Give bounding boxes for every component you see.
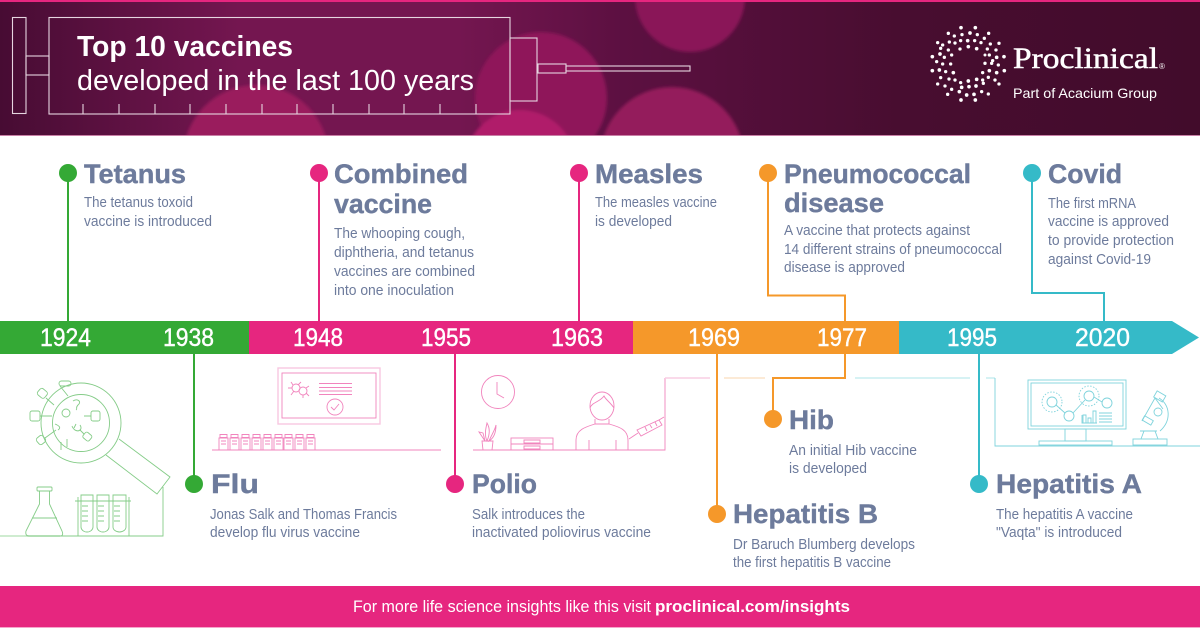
event: Flu 1938: Flu bbox=[211, 469, 259, 499]
event: Hib 1977: Hib bbox=[789, 405, 834, 435]
title: developed in the last 100 years bbox=[77, 65, 474, 97]
year labels: 1948 bbox=[293, 324, 343, 352]
event: Tetanus 1924: vaccine is introduced bbox=[84, 214, 212, 230]
logo: Proclinical bbox=[930, 26, 1165, 102]
event: Flu 1938: Jonas Salk and Thomas Francis bbox=[210, 507, 397, 523]
event: Polio 1955: inactivated poliovirus vaccine bbox=[472, 525, 651, 541]
logo strapline: Part of Acacium Group bbox=[1013, 85, 1157, 101]
event: Measles 1963 bbox=[570, 159, 717, 321]
year labels: 1995 bbox=[947, 324, 997, 352]
icon: dotted ring bbox=[930, 26, 1006, 102]
illustration: patient, clock and syringe bbox=[473, 376, 665, 450]
illustration: virus, flask and test tubes bbox=[0, 381, 170, 536]
event: Tetanus 1924 bbox=[59, 159, 212, 321]
event: Pneumococcal disease: disease is approved bbox=[784, 260, 905, 276]
event: Pneumococcal disease: 14 different strains of pneumococcal bbox=[784, 242, 1002, 258]
event: Covid 2020 bbox=[1023, 159, 1174, 321]
event: Pneumococcal disease: A vaccine that protects against bbox=[784, 223, 970, 239]
event: Combined vaccine 1948 bbox=[310, 159, 475, 321]
year labels: 1924 bbox=[40, 324, 91, 352]
event: Hepatitis B 1969 bbox=[708, 354, 915, 571]
event: Hepatitis B 1969: the first hepatitis B vaccine bbox=[733, 555, 891, 571]
event: Hepatitis A 1995 bbox=[970, 354, 1142, 541]
illustration: monitor and microscope bbox=[995, 378, 1200, 446]
event: Hepatitis B 1969: Dr Baruch Blumberg develops bbox=[733, 537, 915, 553]
event: Hepatitis A 1995: The hepatitis A vaccine bbox=[996, 507, 1133, 523]
event: Combined vaccine 1948: Combined bbox=[334, 159, 468, 189]
year labels: 1938 bbox=[163, 324, 214, 352]
event: Covid 2020: against Covid-19 bbox=[1048, 252, 1151, 268]
year labels: 1955 bbox=[421, 324, 471, 352]
year labels: 1977 bbox=[817, 324, 867, 352]
event: Covid 2020: vaccine is approved bbox=[1048, 214, 1169, 230]
event: Covid 2020: Covid bbox=[1048, 159, 1122, 189]
event: Polio 1955: Salk introduces the bbox=[472, 507, 585, 523]
year labels: 1963 bbox=[551, 324, 603, 352]
event: Hib 1977: An initial Hib vaccine bbox=[789, 443, 917, 459]
event: Hib 1977 bbox=[764, 354, 917, 477]
event: Pneumococcal disease: Pneumococcal bbox=[784, 159, 971, 189]
footer banner bbox=[0, 586, 1200, 628]
event: Combined vaccine 1948: vaccines are combined bbox=[334, 264, 475, 280]
event: Measles 1963: Measles bbox=[595, 159, 703, 189]
event: Combined vaccine 1948: The whooping cough, bbox=[334, 226, 465, 242]
event: Combined vaccine 1948: diphtheria, and tetanus bbox=[334, 245, 474, 261]
year labels: 2020 bbox=[1075, 324, 1130, 352]
event: Polio 1955 bbox=[446, 354, 651, 541]
timeline bar bbox=[0, 321, 1199, 354]
year labels: 1969 bbox=[688, 324, 740, 352]
title: Top 10 vaccines bbox=[77, 31, 293, 63]
event: Covid 2020: The first mRNA bbox=[1048, 196, 1136, 212]
event: Measles 1963: is developed bbox=[595, 214, 672, 230]
year labels bbox=[40, 324, 1130, 352]
pale connector segments bbox=[665, 377, 995, 379]
event: Covid 2020: to provide protection bbox=[1048, 233, 1174, 249]
event: Combined vaccine 1948: into one inoculation bbox=[334, 283, 454, 299]
event: Pneumococcal disease: disease bbox=[784, 188, 884, 218]
event: Combined vaccine 1948: vaccine bbox=[334, 189, 432, 219]
event: Flu 1938: develop flu virus vaccine bbox=[210, 525, 360, 541]
event: Measles 1963: The measles vaccine bbox=[595, 195, 717, 211]
syringe outline bbox=[12, 18, 690, 114]
event: Hepatitis A 1995: Hepatitis A bbox=[996, 469, 1142, 499]
registered mark: ® bbox=[1159, 62, 1165, 71]
logo wordmark: Proclinical bbox=[1013, 42, 1158, 75]
footer text: proclinical.com/insights bbox=[655, 597, 850, 616]
event: Polio 1955: Polio bbox=[472, 469, 537, 499]
illustration: vials and screen bbox=[212, 368, 441, 450]
event: Flu 1938 bbox=[185, 354, 397, 541]
event: Tetanus 1924: The tetanus toxoid bbox=[84, 195, 193, 211]
footer text bbox=[353, 597, 850, 616]
event: Hepatitis B 1969: Hepatitis B bbox=[733, 499, 878, 529]
event: Hepatitis A 1995: "Vaqta" is introduced bbox=[996, 525, 1122, 541]
event: Tetanus 1924: Tetanus bbox=[84, 159, 186, 189]
title bbox=[77, 31, 474, 97]
event: Hib 1977: is developed bbox=[789, 461, 867, 477]
header banner bbox=[0, 0, 1200, 136]
event: Pneumococcal disease bbox=[759, 159, 1002, 321]
footer text: For more life science insights like this visit bbox=[353, 597, 651, 616]
arrow head bbox=[899, 321, 1199, 354]
